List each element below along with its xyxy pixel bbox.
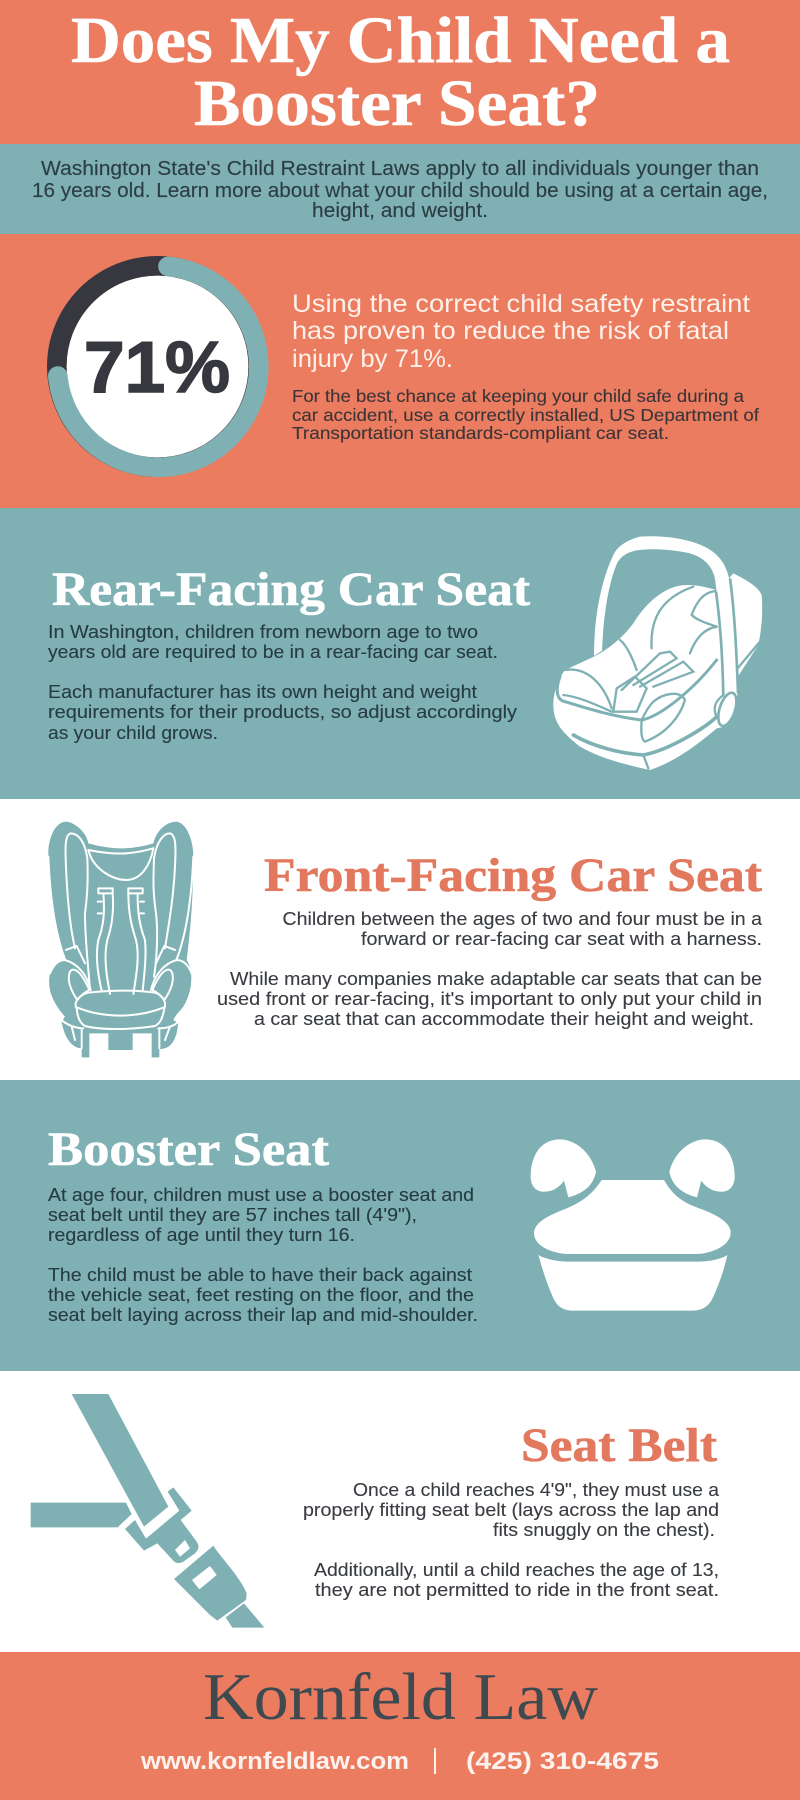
booster seat text: seat belt laying across their lap and mid-shoulder. <box>48 1304 478 1325</box>
icon: seat belt <box>31 1394 264 1628</box>
intro text: height, and weight. <box>312 200 488 222</box>
front-facing text: a car seat that can accommodate their height and weight. <box>254 1008 754 1029</box>
title: Booster Seat? <box>194 67 600 140</box>
title: Does My Child Need a <box>71 4 730 77</box>
front-facing text: forward or rear-facing car seat with a harness. <box>361 928 762 949</box>
icon: front-facing car seat <box>48 822 193 1057</box>
statistic headline <box>292 290 750 373</box>
statistic headline: injury by 71%. <box>292 345 453 373</box>
heading: rear-facing: Rear-Facing Car Seat <box>52 563 530 616</box>
front-facing text: While many companies make adaptable car seats that can be <box>230 968 762 989</box>
intro text <box>32 158 768 222</box>
statistic detail text <box>292 386 759 443</box>
booster seat text: The child must be able to have their back against <box>48 1264 472 1285</box>
rear-facing text: Each manufacturer has its own height and weight <box>48 681 477 702</box>
statistic detail text: Transportation standards-compliant car seat. <box>292 423 669 443</box>
intro text: Washington State's Child Restraint Laws apply to all individuals younger than <box>41 158 759 180</box>
rear-facing text: years old are required to be in a rear-facing car seat. <box>48 641 498 662</box>
statistic detail text: For the best chance at keeping your child safe during a <box>292 386 744 406</box>
statistic headline: Using the correct child safety restraint <box>292 290 750 318</box>
panel: title band <box>0 0 800 144</box>
booster seat text <box>48 1184 478 1325</box>
icon: infant car seat <box>553 536 762 770</box>
footer contact details <box>140 1748 659 1775</box>
intro text: 16 years old. Learn more about what your child should be using at a certain age, <box>32 180 768 202</box>
panel: intro band <box>0 144 800 234</box>
footer contact details: (425) 310-4675 <box>466 1748 659 1775</box>
booster seat text: regardless of age until they turn 16. <box>48 1224 355 1245</box>
rear-facing text: In Washington, children from newborn age to two <box>48 621 478 642</box>
panel: front-facing car seat band <box>0 799 800 1080</box>
panel: booster seat band <box>0 1080 800 1371</box>
footer firm name: Kornfeld Law <box>203 1660 599 1734</box>
title <box>71 4 730 140</box>
booster seat text: the vehicle seat, feet resting on the floor, and the <box>48 1284 474 1305</box>
seat belt text <box>303 1479 720 1600</box>
rear-facing text: requirements for their products, so adjust accordingly <box>48 701 518 722</box>
heading: front-facing: Front-Facing Car Seat <box>264 849 762 902</box>
footer contact details: www.kornfeldlaw.com <box>140 1748 409 1775</box>
statistic headline: has proven to reduce the risk of fatal <box>292 317 729 345</box>
front-facing text: used front or rear-facing, it's important to only put your child in <box>217 988 762 1009</box>
panel: statistic band <box>0 234 800 508</box>
panel: footer band <box>0 1652 800 1800</box>
seat belt text: they are not permitted to ride in the front seat. <box>315 1579 719 1600</box>
rear-facing text <box>48 621 518 743</box>
panel: seat belt band <box>0 1371 800 1652</box>
seat belt text: fits snuggly on the chest). <box>493 1519 715 1540</box>
heading: seat belt: Seat Belt <box>521 1419 717 1472</box>
heading: booster seat: Booster Seat <box>48 1123 329 1176</box>
chart: 71% donut <box>57 266 259 467</box>
rear-facing text: as your child grows. <box>48 722 218 743</box>
seat belt text: properly fitting seat belt (lays across the lap and <box>303 1499 719 1520</box>
statistic detail text: car accident, use a correctly installed, US Department of <box>292 405 759 425</box>
panel: rear-facing car seat band <box>0 508 800 799</box>
booster seat text: At age four, children must use a booster seat and <box>48 1184 474 1205</box>
seat belt text: Once a child reaches 4'9", they must use a <box>353 1479 720 1500</box>
front-facing text: Children between the ages of two and four must be in a <box>282 908 763 929</box>
front-facing text <box>217 908 763 1029</box>
donut value: 71% <box>84 328 230 408</box>
icon: booster seat <box>531 1139 735 1311</box>
booster seat text: seat belt until they are 57 inches tall (4'9"), <box>48 1204 417 1225</box>
seat belt text: Additionally, until a child reaches the age of 13, <box>314 1559 719 1580</box>
